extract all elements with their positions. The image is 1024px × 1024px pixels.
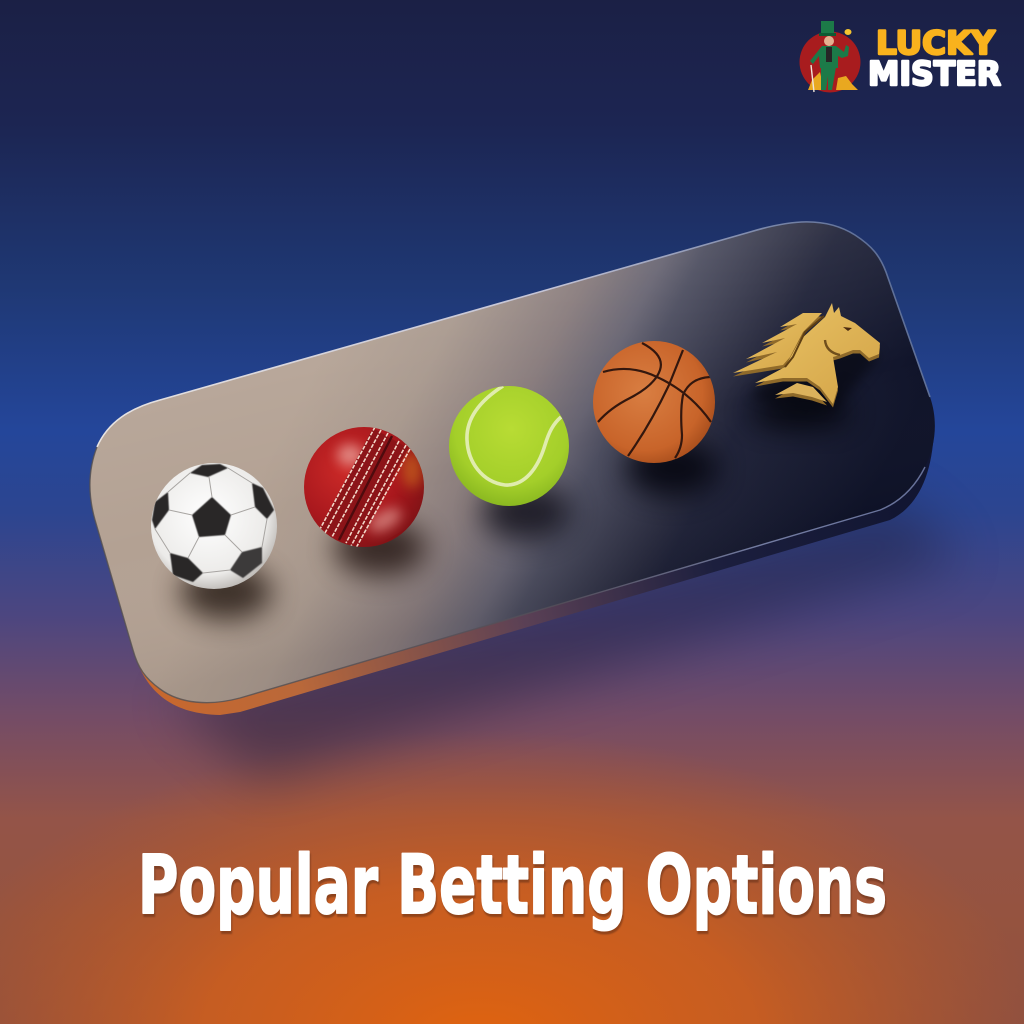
horse drop shadow bbox=[750, 330, 880, 410]
tray lower lip bbox=[133, 430, 934, 715]
tray cast shadow bbox=[170, 500, 960, 780]
icon: cricket ball bbox=[304, 427, 424, 548]
horse mane bbox=[733, 313, 822, 373]
icon: tennis ball bbox=[449, 386, 569, 506]
horse head and neck bbox=[755, 303, 880, 404]
icon: basketball bbox=[593, 341, 715, 463]
tray top rim bbox=[97, 222, 930, 447]
logo wordmark MISTER: MISTER bbox=[868, 54, 1001, 93]
horse jaw and eye bbox=[825, 340, 840, 355]
horse mane groove bbox=[785, 316, 824, 367]
tray left and bottom edge bbox=[90, 447, 925, 703]
icon: soccer ball bbox=[151, 463, 277, 589]
ball shadows bbox=[180, 396, 850, 620]
panel: rounded tilted tray bbox=[90, 222, 960, 780]
tray sheen bbox=[90, 222, 935, 703]
logo mascot bbox=[800, 21, 860, 92]
horse extrusion bbox=[733, 306, 880, 408]
logo: Lucky Mister bbox=[800, 21, 1001, 93]
tray top surface bbox=[90, 222, 935, 703]
icon: golden horse head bbox=[733, 303, 880, 410]
logo wordmark LUCKY: LUCKY bbox=[876, 24, 996, 62]
horse lower lock bbox=[775, 383, 827, 402]
title bbox=[138, 839, 888, 936]
